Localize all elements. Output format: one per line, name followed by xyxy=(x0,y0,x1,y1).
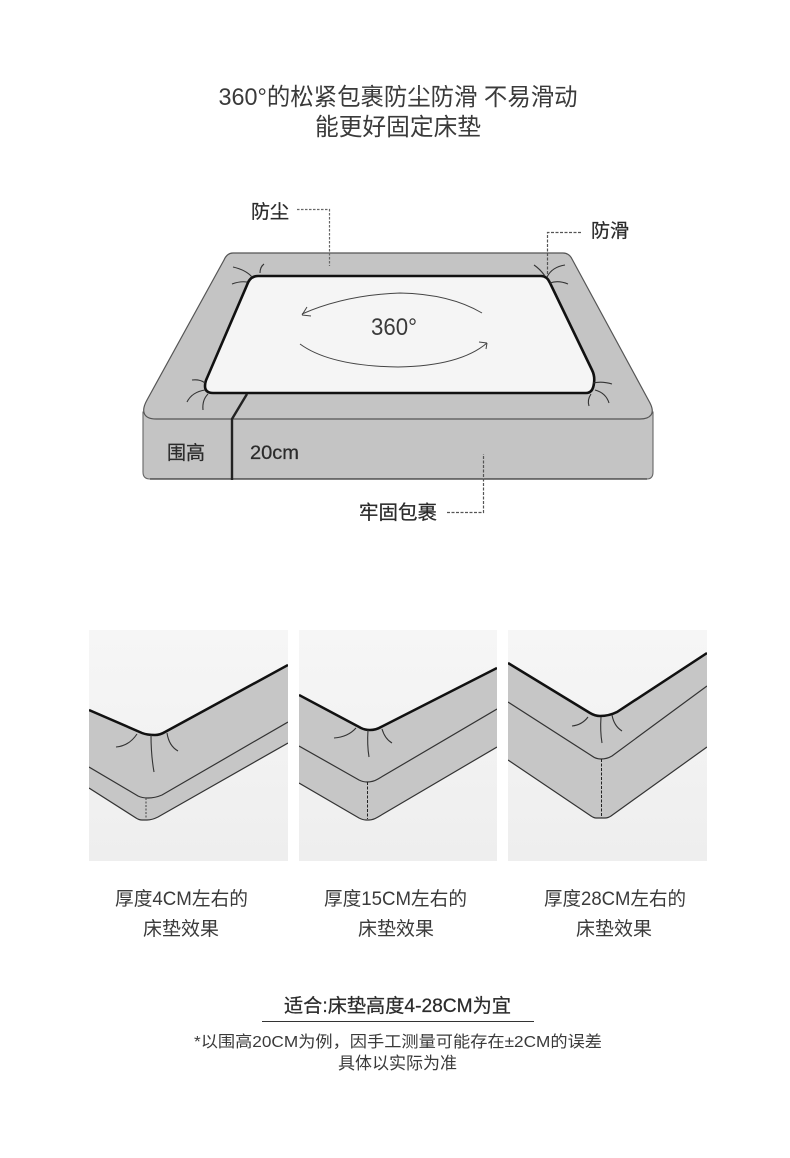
title xyxy=(218,84,578,141)
caption: 28cm: 床垫效果 xyxy=(576,918,652,940)
rotation arrows xyxy=(300,293,487,367)
heading rule xyxy=(262,1021,534,1022)
mattress diagram xyxy=(143,253,653,480)
callout: 牢固包裹: 牢固包裹 xyxy=(359,502,437,524)
caption: 15cm xyxy=(324,888,467,940)
label: 20cm: 20cm xyxy=(250,443,299,464)
panel: 4cm corner xyxy=(89,630,288,861)
front bottom edge xyxy=(150,478,647,480)
caption: 4cm: 床垫效果 xyxy=(143,918,219,940)
top band of fitted sheet xyxy=(144,253,652,419)
callout: 防滑: 防滑 xyxy=(591,220,629,242)
label: 围高: 围高 xyxy=(167,442,205,464)
caption: 15cm: 厚度15CM左右的 xyxy=(324,888,467,910)
note text: *以围高20CM为例，因手工测量可能存在±2CM的误差 xyxy=(194,1033,602,1051)
callout: 防尘: 防尘 xyxy=(251,201,289,223)
panel: 15cm corner xyxy=(299,630,497,861)
caption: 4cm: 厚度4CM左右的 xyxy=(115,888,248,910)
front side of mattress xyxy=(143,412,653,479)
caption: 28cm: 厚度28CM左右的 xyxy=(544,888,686,910)
callout: 防滑 xyxy=(548,220,629,276)
label: 360°: 360° xyxy=(371,314,417,341)
caption: 4cm xyxy=(115,888,248,940)
note text xyxy=(194,1033,602,1073)
caption: 15cm: 床垫效果 xyxy=(358,918,434,940)
caption: 28cm xyxy=(544,888,686,940)
note text: 具体以实际为准 xyxy=(338,1054,457,1073)
mattress top surface inside elastic xyxy=(205,276,594,393)
suitability heading: 适合:床垫高度4-28CM为宜 xyxy=(284,995,511,1017)
callout: 防尘 xyxy=(251,201,330,266)
title: 能更好固定床垫 xyxy=(315,114,481,141)
height seam xyxy=(232,394,247,480)
corner gathers xyxy=(187,264,612,410)
panel: 28cm corner xyxy=(508,630,707,861)
callout: 牢固包裹 xyxy=(359,454,484,524)
title: 360°的松紧包裹防尘防滑 不易滑动 xyxy=(218,84,578,111)
